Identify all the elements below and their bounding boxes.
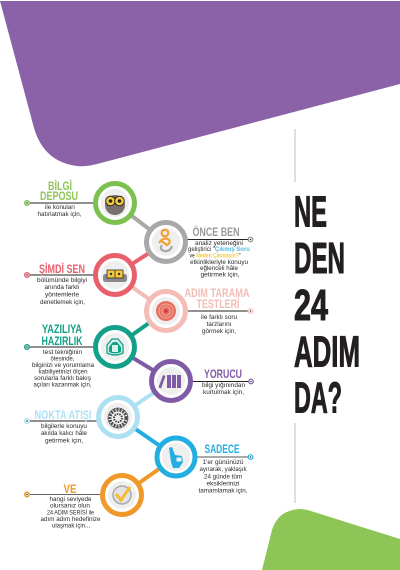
step: Yorucu (152, 362, 253, 400)
step: Sadece: SADECE (204, 444, 240, 456)
step: Yazılıya Hazırlık: HAZIRLIK (42, 336, 83, 348)
step: Yorucu: YORUCU (204, 369, 242, 381)
step: Yazılıya Hazırlık: açıları kazanmak için, (34, 382, 92, 388)
step: Yazılıya Hazırlık: test tekniğinin (43, 349, 83, 356)
step: Adım Tarama Testleri: TESTLERİ (196, 298, 240, 311)
step: Nokta Atışı: NOKTA ATIŞI (34, 410, 92, 422)
green corner shape (262, 509, 400, 570)
step: Adım Tarama Testleri: tarzlarını (206, 321, 232, 328)
step: Yazılıya Hazırlık (25, 324, 135, 388)
step: Ve: hangi seviyede (50, 496, 92, 503)
step: Sadece: eksiklerinizi (206, 480, 240, 488)
step: Sadece: 24 günde tüm (204, 474, 242, 480)
step: Şimdi Sen: ŞİMDİ SEN (39, 263, 85, 276)
step: Önce Ben (146, 222, 253, 278)
step: Şimdi Sen: yöntemlerle (45, 292, 80, 298)
step: Bilgi Deposu: hatırlatmak için, (38, 211, 82, 218)
step: Ve: 24 ADIM SERİSİ ile (47, 510, 94, 516)
step: Önce Ben: eğlenceli hâle (200, 265, 239, 272)
step: Ve: olursanız olun (50, 502, 91, 510)
step: Yazılıya Hazırlık: sorularla farklı bakış (34, 375, 91, 382)
step: Önce Ben: analiz yeteneğini (195, 240, 243, 247)
step: Şimdi Sen: denetlemek için, (40, 299, 85, 306)
step: Nokta Atışı: getirmek için, (45, 438, 83, 444)
step: Önce Ben: ÖNCE BEN (192, 226, 240, 239)
step: Yazılıya Hazırlık: kabiliyetinizi ölçen (38, 368, 88, 376)
icon: owl (105, 195, 125, 215)
step: Nokta Atışı: bilgilerle konuyu (41, 423, 88, 430)
step: Yazılıya Hazırlık: YAZILIYA (42, 324, 82, 336)
step: Ve: VE (64, 484, 77, 496)
step: Adım Tarama Testleri: görmek için, (202, 328, 236, 335)
title: NE (294, 188, 327, 236)
step: Yorucu: bilgi yığınından (202, 382, 246, 389)
step: Bilgi Deposu (25, 180, 135, 222)
step: Yazılıya Hazırlık: ötesinde, (50, 356, 75, 362)
icon: figure hook (159, 230, 172, 251)
step: Önce Ben: getirmek için, (200, 272, 240, 278)
step: Nokta Atışı: akılda kalıcı hâle (41, 430, 88, 437)
step: Sadece: 1'er gününüzü (202, 459, 244, 466)
icon: check mark (113, 486, 131, 504)
icon: stacked papers (107, 339, 123, 355)
step: Nokta Atışı (25, 398, 138, 444)
step: Ve (25, 476, 142, 530)
step: Şimdi Sen: anında farklı (44, 284, 80, 291)
icon: target (156, 301, 176, 321)
step: Sadece: ayırarak, yaklaşık (200, 466, 247, 473)
step: Bilgi Deposu: BİLGİ (48, 180, 72, 193)
step: Bilgi Deposu: ile konuları (45, 204, 75, 211)
icon: sofa (103, 270, 127, 282)
step: Adım Tarama Testleri: ADIM TARAMA (184, 288, 250, 300)
step: Önce Ben: geliştirici "Çıkmış Soru (188, 246, 250, 253)
step: Şimdi Sen (25, 256, 135, 306)
title: DEN (294, 234, 345, 283)
purple corner shape (0, 1, 400, 166)
title: 24 (294, 281, 328, 330)
title (294, 129, 360, 503)
step: Sadece: tamamlamak için, (198, 488, 248, 494)
step: Adım Tarama Testleri: ile farklı soru (201, 314, 238, 321)
step: Ve: adım adım hedefinize (40, 516, 101, 523)
step: Önce Ben: ve Neden Çıkmasın?" (190, 252, 240, 260)
icon: pointing hand (169, 447, 183, 468)
title: DA? (294, 374, 342, 422)
step: Şimdi Sen: bölümünde bilgiyi (37, 277, 87, 284)
icon: dartboard (108, 408, 128, 428)
connectors between steps (115, 203, 176, 495)
step: Bilgi Deposu: DEPOSU (40, 191, 78, 203)
icon: books (158, 375, 181, 388)
step: Ve: ulaşmak için... (52, 522, 90, 530)
step: Sadece (157, 438, 253, 494)
step: Yazılıya Hazırlık: bilginizi ve yorumlama (32, 362, 95, 369)
step: Önce Ben: etkinlikleriyle konuyu (190, 259, 249, 266)
step: Yorucu: kurtulmak için, (203, 389, 244, 396)
step: Adım Tarama Testleri (146, 288, 253, 335)
